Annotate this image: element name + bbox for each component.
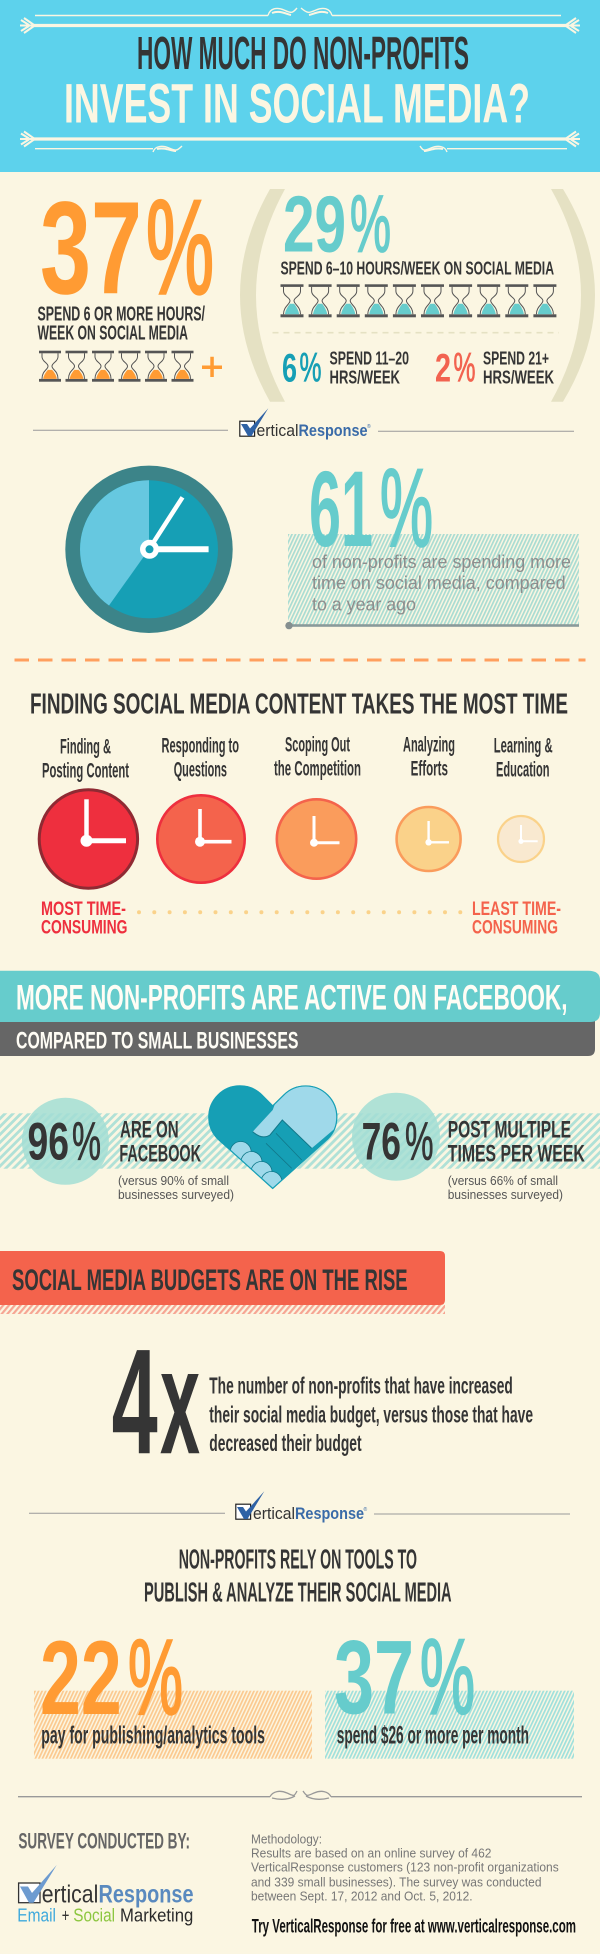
base line with dot xyxy=(285,622,579,629)
scale label: most time-consuming: MOST TIME- xyxy=(41,899,126,920)
budgets banner xyxy=(0,1251,445,1314)
stat: 22% pay for tools: 22 xyxy=(40,1620,122,1737)
description text: WEEK ON SOCIAL MEDIA xyxy=(38,322,188,344)
big number 37%: 37 xyxy=(40,174,142,321)
description: to a year ago xyxy=(312,595,416,615)
teal banner xyxy=(0,971,600,1022)
number 61%: % xyxy=(380,447,433,570)
number 29%: 29 xyxy=(283,180,346,269)
clock illustration: 61% xyxy=(65,466,233,633)
stat circle right xyxy=(352,1093,440,1181)
96% text: (versus 90% of small xyxy=(118,1173,229,1188)
76% text: businesses surveyed) xyxy=(448,1187,563,1202)
logo divider 1: ertical xyxy=(256,421,298,440)
panel: time-consuming tasks xyxy=(39,734,553,888)
description xyxy=(209,1372,533,1456)
plus sign xyxy=(202,357,222,377)
task 5: Education xyxy=(496,759,550,782)
top ornament xyxy=(20,8,580,33)
76% number: % xyxy=(405,1111,434,1171)
task 1 xyxy=(39,735,138,888)
stat 2%: 2 xyxy=(435,347,451,391)
number 61%: 61 xyxy=(309,448,373,569)
stat 6%: 6 xyxy=(282,347,297,391)
96% number: 96 xyxy=(28,1112,69,1171)
stat 6% xyxy=(282,345,409,391)
description: of non-profits are spending more xyxy=(312,552,571,572)
stat 2%: % xyxy=(454,345,476,391)
logo divider 2: Response xyxy=(295,1504,364,1523)
stat 6%: % xyxy=(300,345,322,391)
76% number: 76 xyxy=(362,1112,401,1171)
task 3: the Competition xyxy=(274,757,361,780)
76% text: (versus 66% of small xyxy=(448,1173,558,1188)
task 1: Finding & xyxy=(60,735,111,758)
96% text: FACEBOOK xyxy=(119,1140,201,1167)
right parenthesis xyxy=(551,189,595,402)
task 2: Questions xyxy=(174,759,227,782)
stat: 37% spend per month xyxy=(325,1616,574,1759)
stat: 37% spend per month: % xyxy=(420,1616,475,1736)
hatched box xyxy=(288,534,579,625)
logo divider 2 xyxy=(29,1491,570,1523)
task 1: Posting Content xyxy=(42,759,129,782)
76% text xyxy=(448,1116,585,1202)
96% text: businesses surveyed) xyxy=(118,1187,234,1202)
stat circle left xyxy=(22,1098,109,1185)
stat 2% xyxy=(435,345,554,391)
methodology text: VerticalResponse customers (123 non-profit organizations xyxy=(251,1860,559,1875)
stat 2%: SPEND 21+ xyxy=(483,347,549,368)
methodology text: Results are based on an online survey of 462 xyxy=(251,1845,491,1860)
stat 6%: SPEND 11–20 xyxy=(330,347,409,368)
facebook banner xyxy=(0,971,600,1056)
96% text: ARE ON xyxy=(120,1116,179,1143)
stat 6%: HRS/WEEK xyxy=(330,366,400,387)
big 4x: 4 xyxy=(112,1317,158,1485)
footer divider xyxy=(18,1791,582,1799)
scale label: most time-consuming: CONSUMING xyxy=(41,917,128,938)
footer logo: Response xyxy=(98,1880,194,1908)
description: time on social media, compared xyxy=(312,573,566,593)
stat: 4x budget xyxy=(112,1317,533,1485)
stat 2%: HRS/WEEK xyxy=(483,366,554,387)
description: decreased their budget xyxy=(209,1430,362,1456)
footer logo: Marketing xyxy=(120,1906,193,1926)
footer logo: ertical xyxy=(42,1880,98,1908)
footer logo: Email xyxy=(17,1906,56,1926)
task 5 xyxy=(494,734,553,862)
header banner xyxy=(0,0,600,172)
survey credit heading: SURVEY CONDUCTED BY: xyxy=(18,1828,190,1853)
methodology text: Methodology: xyxy=(251,1831,322,1846)
methodology text xyxy=(251,1831,559,1904)
description xyxy=(312,552,571,615)
scale label: most time-consuming xyxy=(41,899,128,938)
logo divider 1: Response xyxy=(298,421,368,440)
task 3 xyxy=(274,734,361,879)
stat: 4x budget: x xyxy=(160,1317,200,1485)
stat: 22% pay for tools xyxy=(34,1617,312,1759)
methodology text: and 339 small businesses). The survey was conducted xyxy=(251,1875,542,1890)
number 29%: % xyxy=(350,180,391,270)
stat: 22% pay for tools: % xyxy=(128,1617,183,1737)
hourglass row: orange xyxy=(39,351,194,382)
hatched band xyxy=(0,1113,600,1169)
scale label: least time-consuming xyxy=(472,899,561,938)
task 2 xyxy=(157,735,245,883)
96% text xyxy=(118,1116,234,1202)
bottom ornament xyxy=(20,132,580,152)
logo divider 1: ® xyxy=(367,423,371,430)
footer logo xyxy=(17,1865,194,1926)
task 3: Scoping Out xyxy=(285,734,350,757)
footer logo: + xyxy=(62,1906,69,1926)
task 4: Analyzing xyxy=(403,734,455,757)
stat: 37% spend 6+ hours xyxy=(38,173,222,382)
description text: SPEND 6 OR MORE HOURS/ xyxy=(38,304,205,326)
logo divider 2: ertical xyxy=(253,1504,295,1523)
scale label: least time-consuming: LEAST TIME- xyxy=(472,899,561,920)
task 4 xyxy=(397,734,461,871)
grey sub-banner xyxy=(0,1015,595,1056)
methodology text: between Sept. 17, 2012 and Oct. 5, 2012. xyxy=(251,1889,473,1904)
panel: breakdown in parentheses xyxy=(240,180,595,402)
description text xyxy=(38,304,205,344)
stat: 37% spend per month: 37 xyxy=(334,1619,414,1736)
stat: 22% pay for tools: pay for publishing/analytics tools xyxy=(41,1721,265,1749)
task 4: Efforts xyxy=(411,757,448,780)
task 2: Responding to xyxy=(162,735,239,758)
heading: tools xyxy=(144,1544,452,1607)
scale label: least time-consuming: CONSUMING xyxy=(472,917,558,938)
hourglass row: teal xyxy=(280,284,556,317)
left parenthesis xyxy=(240,189,285,402)
logo divider 1 xyxy=(33,408,574,440)
banner subheading: COMPARED TO SMALL BUSINESSES xyxy=(16,1027,298,1054)
footer logo: Social xyxy=(73,1906,115,1926)
panel: 61% stat xyxy=(285,447,579,629)
panel: facebook stats xyxy=(0,1080,600,1202)
big number 37%: % xyxy=(146,173,214,322)
96% number: % xyxy=(72,1111,101,1171)
icon: handshake heart xyxy=(208,1085,338,1190)
logo divider 2: ® xyxy=(364,1506,368,1513)
